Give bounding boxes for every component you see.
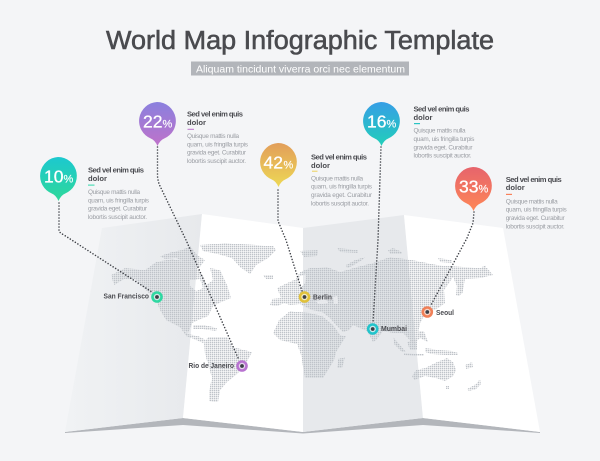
australia [412, 358, 456, 381]
text block: 10%: gravida eget. Curabitur [88, 206, 148, 213]
balloon: 22%: % [162, 118, 172, 130]
text block: 16%: Sed vel enim quis [414, 104, 470, 114]
pin: Rio de Janeiro: Rio de Janeiro [188, 363, 234, 370]
text block: 42%: Sed vel enim quis [311, 152, 367, 162]
balloon: 33%: % [478, 184, 488, 196]
text block: 16%: gravida eget. Curabitur [414, 144, 473, 151]
connector: 10% to San Francisco [59, 203, 152, 292]
pin: Berlin [299, 291, 332, 303]
south america [204, 337, 252, 402]
text block: 42%: lobortis suscipit auctor. [311, 200, 369, 207]
text block: 10% [88, 166, 149, 221]
balloon: 10% [40, 157, 77, 201]
europe and asia [270, 257, 493, 344]
text block: 22%: dolor [187, 118, 206, 127]
map panel 4 [404, 215, 540, 432]
pin: Mumbai: Mumbai [381, 326, 407, 333]
iceland [263, 275, 273, 279]
pin: Berlin: Berlin [313, 294, 332, 302]
text block: 42%: quam, uis fringilla turpis [311, 184, 372, 191]
text block: 22%: Sed vel enim quis [187, 110, 243, 119]
balloon: 42%: % [284, 160, 294, 172]
caribbean [193, 325, 217, 331]
balloon: 42% [260, 143, 297, 187]
philippines [418, 331, 426, 340]
arctic islands [160, 246, 205, 268]
balloon: 22% [139, 102, 176, 146]
balloon: 10%: % [64, 174, 74, 186]
text block: 16% [414, 104, 474, 160]
indonesia [393, 337, 458, 356]
connector: 16% to Mumbai [373, 147, 381, 323]
connector: 42% to Berlin [278, 190, 302, 291]
balloon: 16% [363, 102, 400, 146]
balloon: 16%: % [386, 118, 396, 130]
folded paper map [65, 214, 540, 434]
pin: San Francisco: San Francisco [104, 294, 149, 300]
pin: Seoul [422, 306, 454, 318]
map shadow [65, 418, 540, 434]
text block: 33%: Quisque mattis nulla [506, 198, 558, 205]
text block: 16%: quam, uis fringilla turpis [414, 136, 474, 143]
text block: 42%: Quisque mattis nulla [311, 175, 363, 182]
text block: 10%: Sed vel enim quis [88, 166, 144, 175]
text block: 22%: gravida eget. Curabitur [187, 150, 247, 157]
text block: 10%: quam, uis fringilla turpis [88, 197, 149, 204]
pin: Rio de Janeiro [188, 360, 248, 372]
title: World Map Infographic Template [106, 27, 494, 55]
madagascar [337, 357, 345, 368]
pin: Seoul: Seoul [436, 310, 454, 317]
map panel 2 [183, 214, 303, 432]
text block: 22% [187, 110, 248, 165]
text block: 10%: Quisque mattis nulla [88, 189, 140, 196]
map panel 3 [303, 215, 423, 432]
greenland [200, 243, 276, 274]
balloon: 42%: 42 [264, 152, 283, 172]
text block: 33% [506, 175, 567, 230]
arctic outliers [300, 248, 486, 272]
text block: 42%: dolor [311, 161, 330, 170]
connector: 33% to Seoul [431, 212, 474, 305]
text block: 16%: Quisque mattis nulla [414, 128, 466, 135]
text block: 33%: Sed vel enim quis [506, 175, 562, 184]
text block: 16%: dolor [414, 113, 433, 122]
text block: 33%: gravida eget. Curabitur [506, 215, 566, 222]
text block: 42% [311, 152, 373, 207]
text block: 33%: dolor [506, 183, 525, 192]
africa [273, 311, 346, 378]
subtitle banner: Aliquam tincidunt viverra orci nec elementum [196, 64, 405, 75]
text block: 22%: quam, uis fringilla turpis [187, 141, 248, 148]
balloon: 16%: 16 [367, 112, 386, 132]
text block: 22%: lobortis suscipit auctor. [187, 158, 246, 165]
text block: 33%: lobortis suscipit auctor. [506, 223, 565, 230]
text block: 42%: gravida eget. Curabitur [311, 192, 373, 199]
text block: 22%: Quisque mattis nulla [187, 133, 239, 140]
central america [180, 327, 206, 343]
map panel 1 [65, 214, 202, 432]
pin: Mumbai [367, 323, 407, 335]
connector: 22% to Rio de Janeiro [158, 147, 239, 360]
text block: 10%: lobortis suscipit auctor. [88, 214, 147, 221]
text block: 16%: lobortis suscipit auctor. [414, 153, 472, 160]
new zealand and islands [446, 362, 481, 391]
balloon: 22%: 22 [143, 112, 162, 132]
pin: San Francisco [104, 291, 163, 303]
north america [111, 259, 231, 333]
balloon: 33%: 33 [459, 176, 478, 196]
text block: 10%: dolor [88, 174, 107, 183]
japan [456, 284, 463, 296]
balloon: 33% [455, 167, 492, 211]
balloon: 10%: 10 [44, 166, 64, 186]
dotted world map [111, 243, 493, 402]
text block: 33%: quam, uis fringilla turpis [506, 207, 567, 214]
